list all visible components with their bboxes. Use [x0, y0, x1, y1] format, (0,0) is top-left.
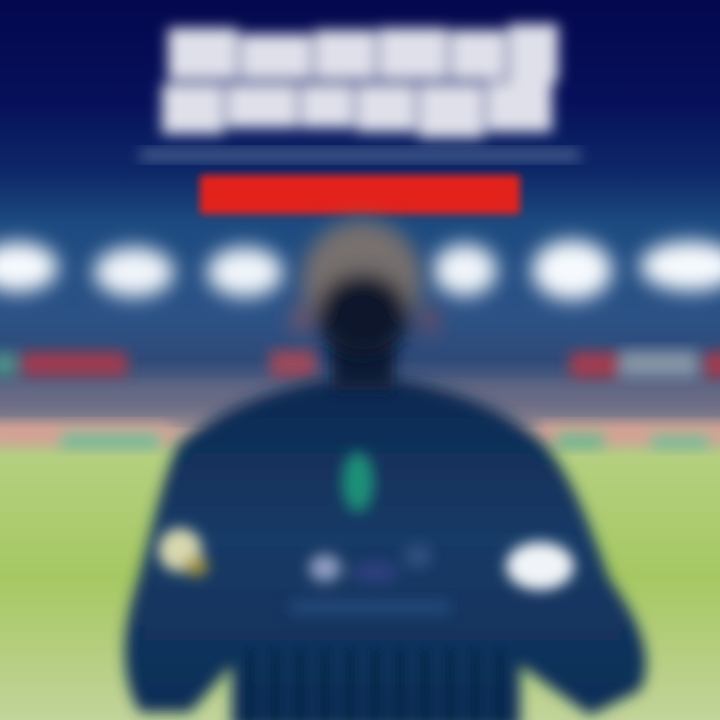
sponsor logo on the back	[290, 544, 450, 614]
subtitle: illegible blurred line	[140, 149, 580, 161]
title: illegible blurred white headline	[162, 24, 558, 138]
crowd and perimeter strip above the pitch	[0, 424, 720, 448]
figure: man seen from behind	[125, 220, 646, 720]
banner: red label	[200, 175, 520, 214]
red advertising boards in the stands	[0, 350, 720, 378]
neck	[332, 340, 394, 390]
torso and arms	[125, 380, 646, 720]
icon: right sleeve badge	[506, 542, 574, 590]
head	[293, 220, 437, 357]
shirt stripes at the hem	[250, 650, 500, 720]
stands: darker tier behind the floodlights	[0, 390, 720, 415]
icon: left sleeve badge	[158, 528, 208, 576]
icon: green collar emblem	[342, 452, 374, 512]
floodlights row	[0, 240, 720, 300]
